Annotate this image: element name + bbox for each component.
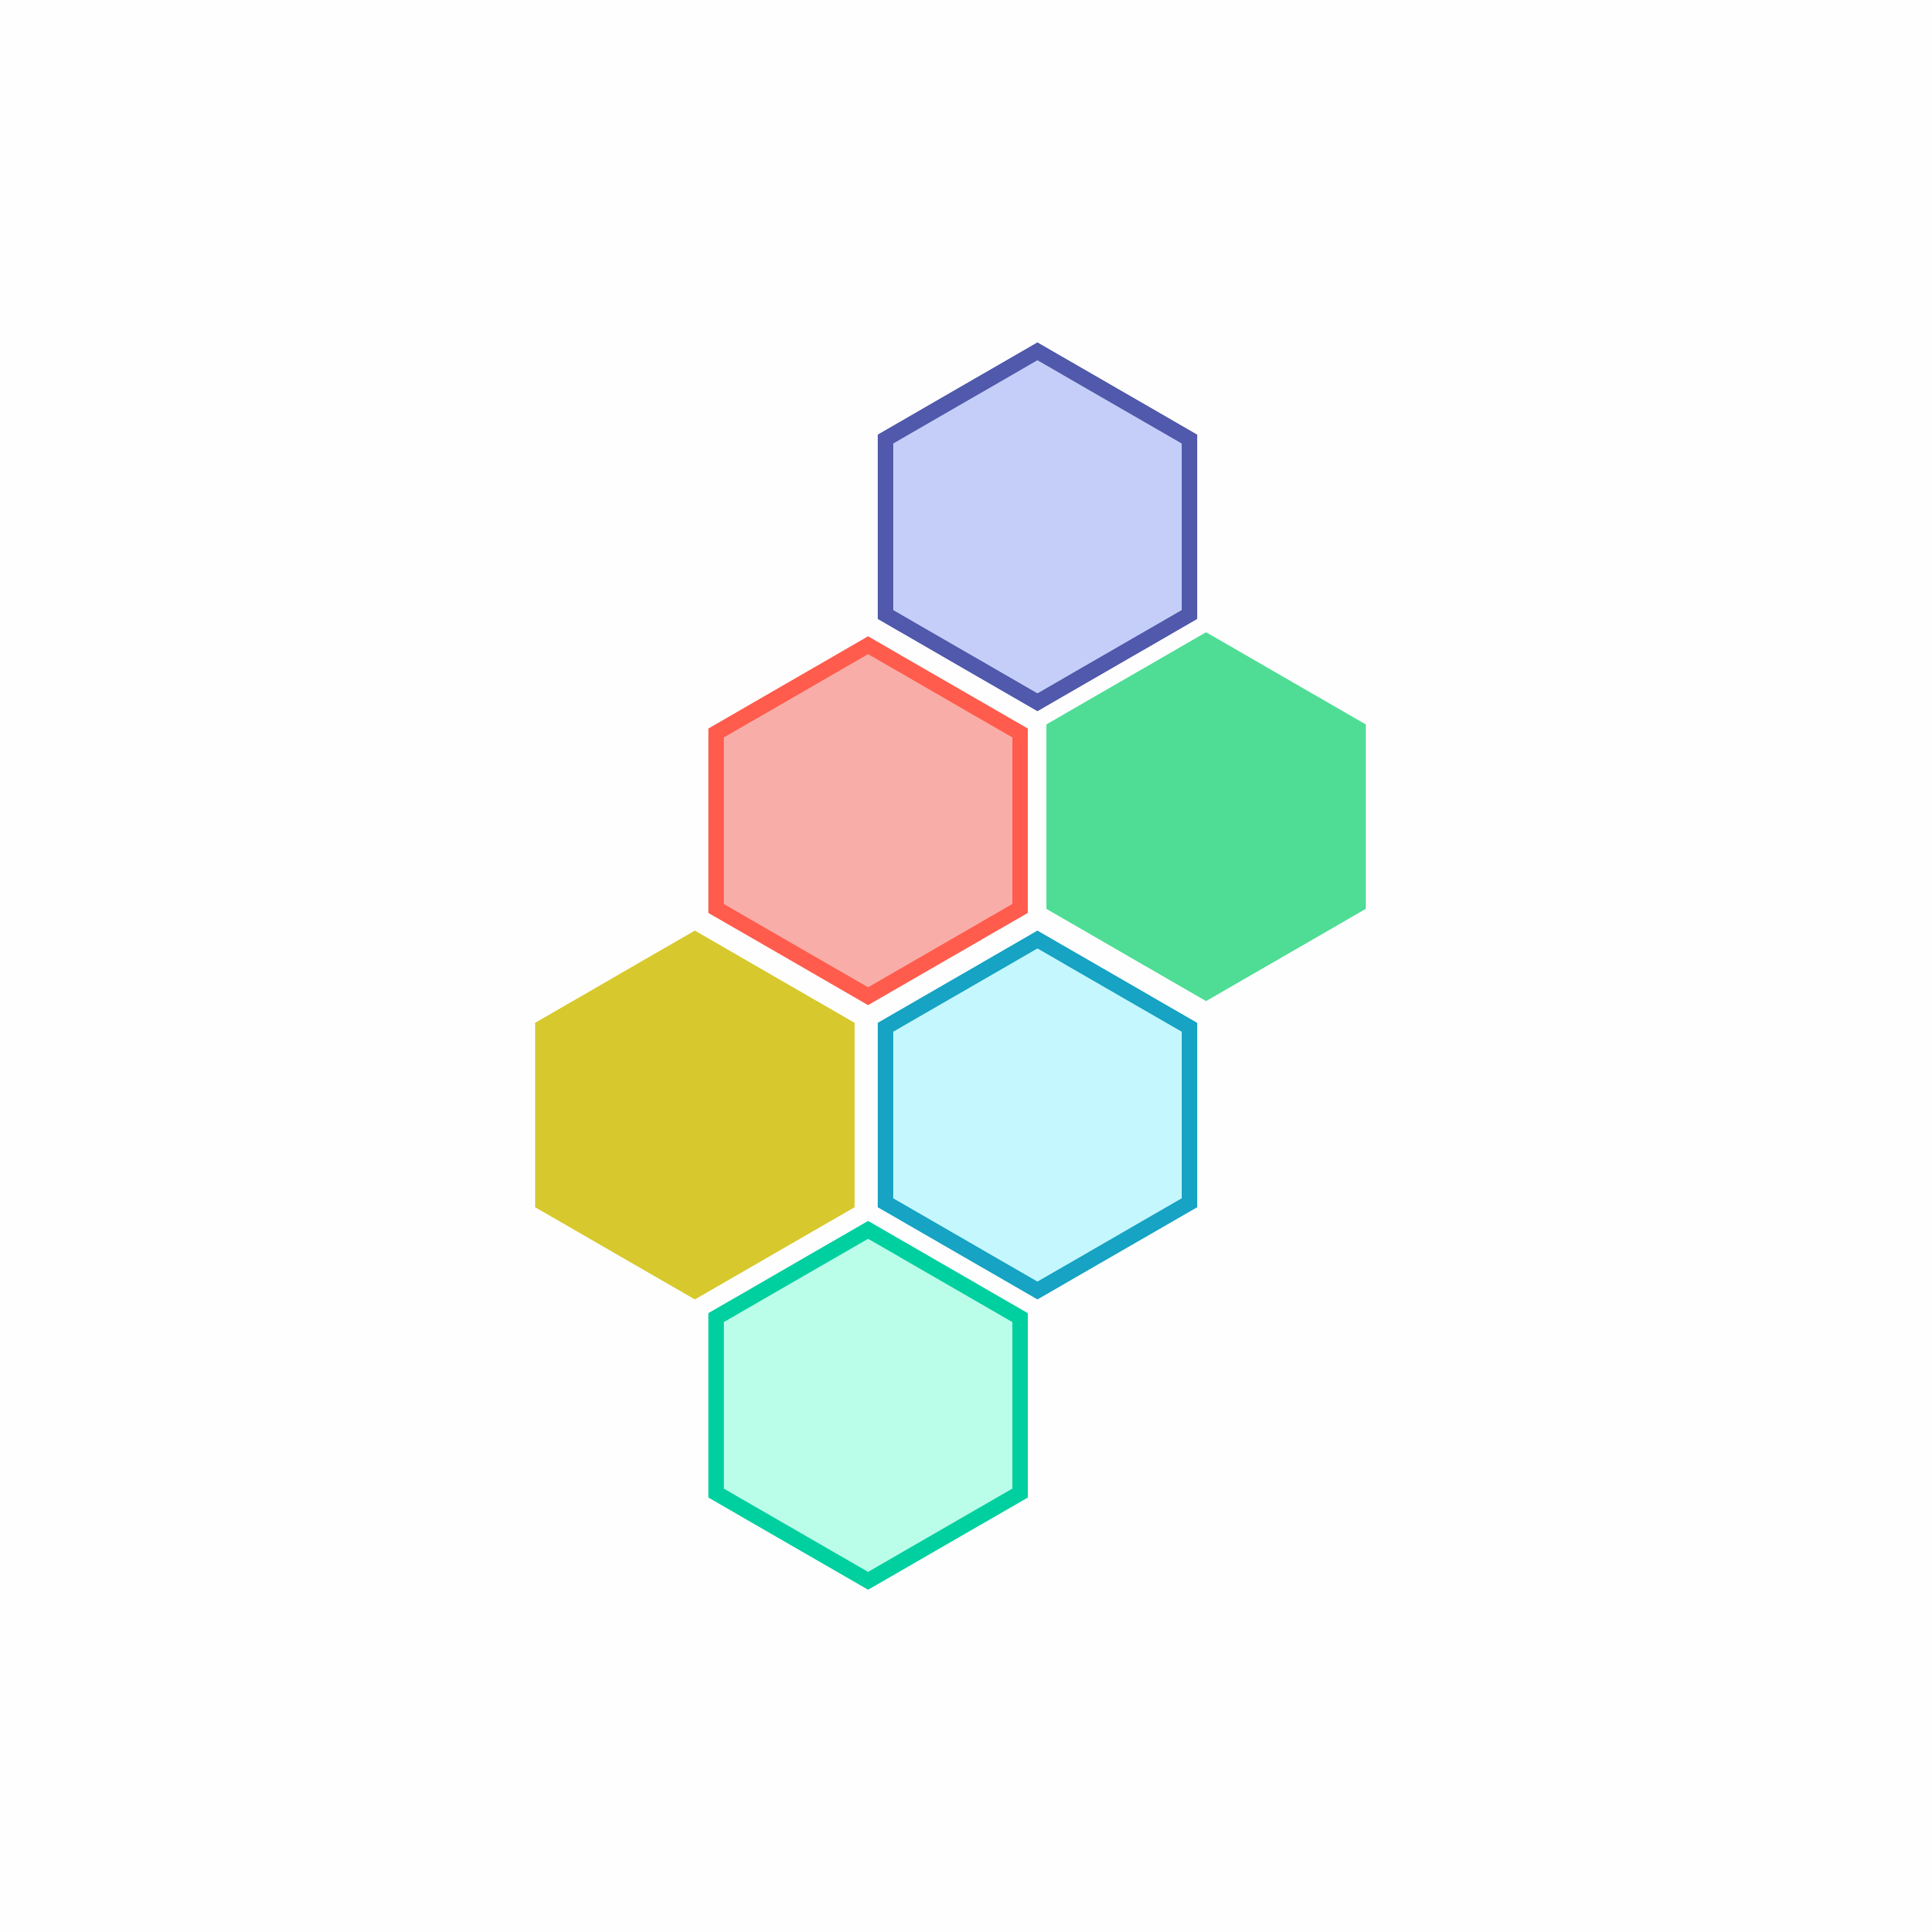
hexagon: blue outlined, top — [886, 352, 1189, 702]
hexagon: cyan outlined, lower right — [886, 940, 1189, 1291]
hexagon: mint outlined, bottom — [716, 1230, 1020, 1581]
hexagon: yellow solid, left — [535, 931, 855, 1300]
hexagon: red outlined, upper middle — [716, 645, 1020, 996]
hexagon: green solid, upper right — [1046, 632, 1366, 1001]
